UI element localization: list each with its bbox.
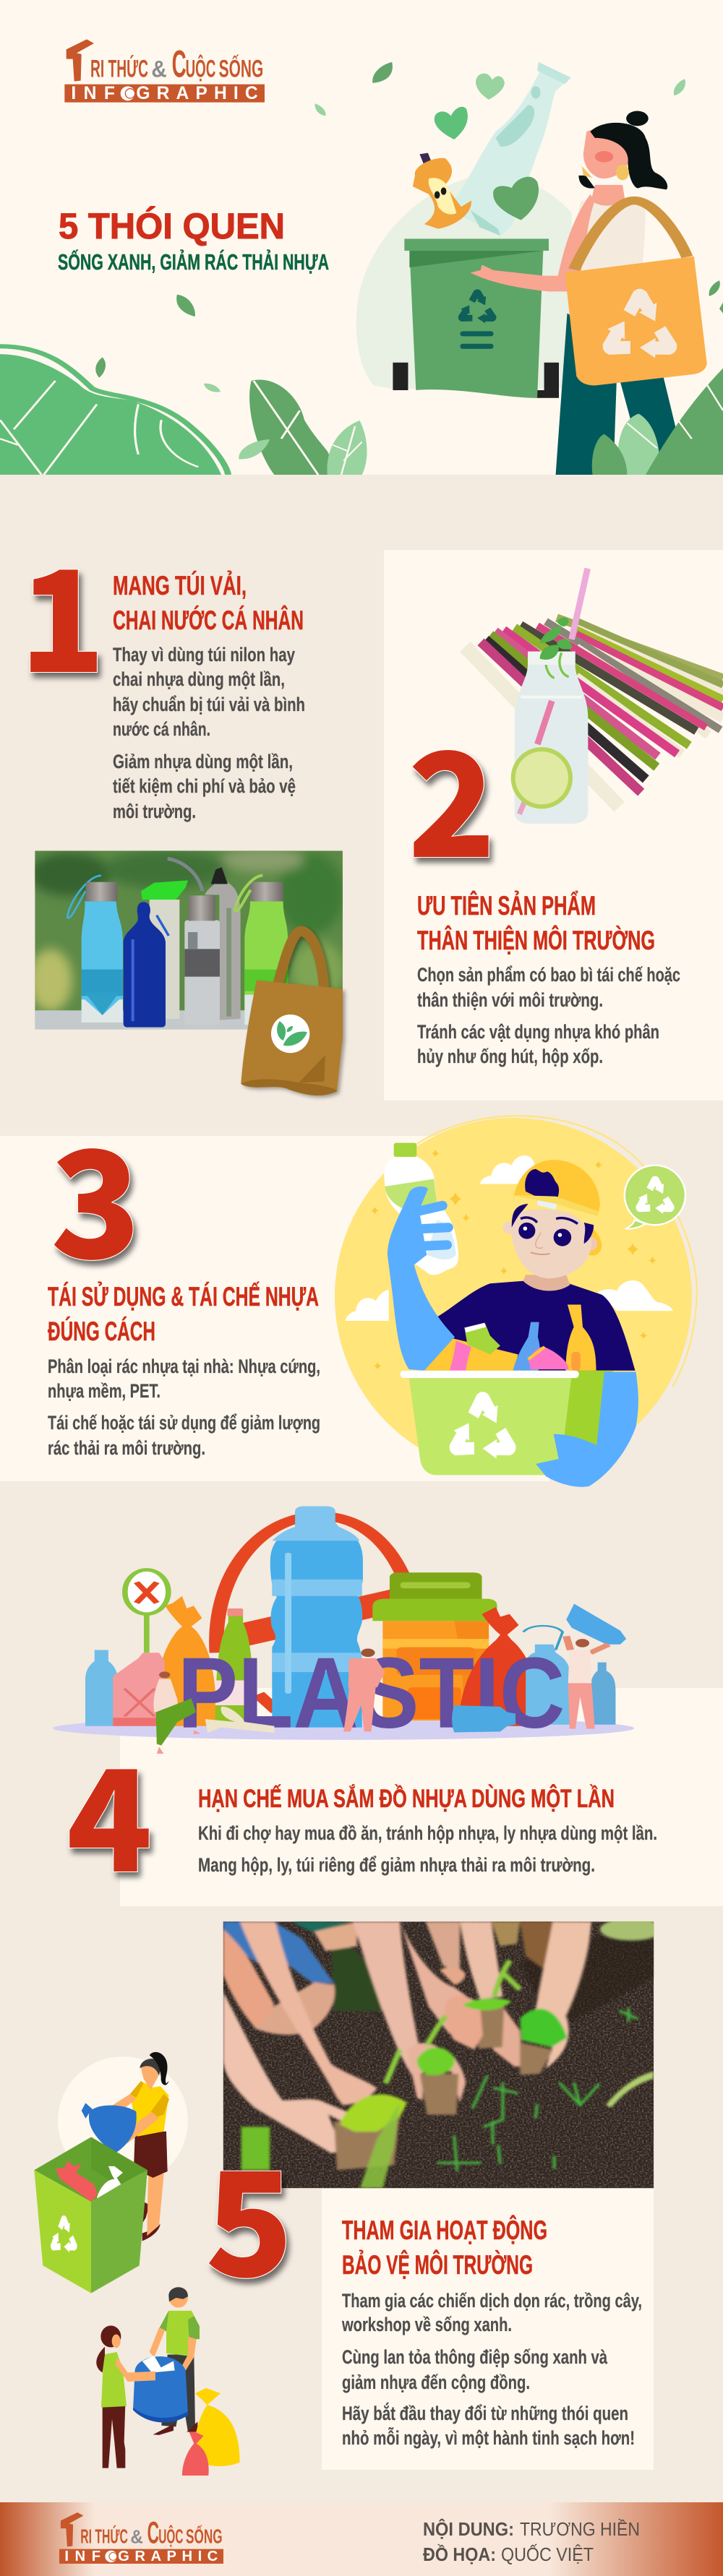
basket	[400, 1371, 615, 1475]
bottle in hand	[384, 1143, 458, 1275]
heading habit 2	[417, 890, 655, 955]
panel: habit 3	[0, 1087, 697, 1487]
panel: habit 2	[384, 550, 723, 1100]
number 4: 4	[67, 1709, 153, 1913]
text card	[322, 2189, 654, 2470]
blue jug right	[523, 1626, 570, 1725]
text habit 5: giảm nhựa đến cộng đồng.	[342, 2372, 530, 2393]
woman with ponytail	[96, 2326, 155, 2468]
text habit 2	[417, 964, 680, 1067]
logo: INF	[71, 84, 115, 103]
outer ring	[416, 1116, 697, 1387]
footer logo: UỘC	[158, 2525, 183, 2547]
soil texture	[223, 1921, 654, 2188]
text habit 1: Thay vì dùng túi nilon hay	[113, 644, 295, 665]
text habit 3: Phân loại rác nhựa tại nhà: Nhựa cứng,	[48, 1356, 320, 1377]
arms	[223, 1929, 274, 2027]
heading habit 1: CHAI NƯỚC CÁ NHÂN	[113, 605, 304, 635]
dark blue aluminium bottle	[124, 902, 168, 1028]
footer logo: INF	[64, 2549, 100, 2564]
footer	[0, 2502, 723, 2576]
red bag	[459, 1607, 542, 1726]
large water bottle	[270, 1506, 363, 1728]
subtitle: SỐNG XANH, GIẢM RÁC THẢI NHỰA	[58, 249, 329, 275]
credits: ĐỒ HỌA:	[423, 2543, 496, 2565]
green bottle	[235, 876, 288, 1025]
blue waste bin bag	[133, 2356, 188, 2423]
man lifting jug	[566, 1604, 626, 1729]
green bin	[34, 2137, 147, 2293]
title: 5 THÓI QUEN	[59, 206, 285, 246]
heading habit 3: TÁI SỬ DỤNG & TÁI CHẾ NHỰA	[48, 1281, 319, 1311]
hearts	[435, 74, 505, 139]
panel: habit 5	[34, 1918, 663, 2476]
speech bubble recycle	[625, 1166, 685, 1229]
tote bag	[565, 257, 707, 385]
blob behind bin	[356, 175, 572, 389]
header illustration: recycling woman and leaves	[0, 62, 723, 475]
number 3: 3	[51, 1087, 141, 1301]
text habit 1: nước cá nhân.	[113, 718, 210, 740]
credits: NỘI DUNG:	[423, 2518, 514, 2540]
photo: children planting seedlings	[223, 1918, 663, 2188]
heading habit 1	[113, 570, 304, 635]
right glove	[536, 1372, 638, 1487]
heading habit 1: MANG TÚI VẢI,	[113, 570, 247, 600]
heading habit 5: BẢO VỆ MÔI TRƯỜNG	[342, 2249, 533, 2280]
number 1: 1	[20, 509, 106, 713]
sparkle stars	[371, 1150, 656, 1369]
prohibition sign	[216, 1516, 415, 1711]
heading habit 5: THAM GIA HOẠT ĐỘNG	[342, 2215, 547, 2245]
text habit 1: chai nhựa dùng một lần,	[113, 668, 285, 690]
shirt	[424, 1281, 636, 1371]
credits	[423, 2518, 640, 2565]
footer logo	[59, 2512, 223, 2564]
standing person	[343, 1649, 385, 1731]
green glass bottle	[215, 1608, 254, 1725]
panel: habit 4	[53, 1506, 723, 1913]
heading habit 2: ƯU TIÊN SẢN PHẨM	[417, 890, 596, 921]
sitting person	[153, 1671, 200, 1754]
clouds	[345, 1155, 673, 1321]
text habit 2: hủy như ống hút, hộp xốp.	[417, 1046, 603, 1067]
number 2: 2	[408, 689, 496, 899]
heart on bottle	[493, 177, 539, 220]
glass bottle	[454, 62, 571, 236]
cream circle	[58, 2056, 188, 2186]
text habit 1	[113, 644, 305, 822]
text habit 1: hãy chuẩn bị túi vải và bình	[113, 694, 305, 715]
yellow circle	[335, 1118, 692, 1475]
photo: reusable bottles	[29, 848, 345, 1095]
text habit 5: workshop về sống xanh.	[341, 2314, 512, 2335]
spoon and fork	[205, 1707, 274, 1733]
silver bottle	[168, 858, 241, 1020]
logo	[64, 39, 265, 103]
left glove	[388, 1186, 455, 1371]
green bin	[393, 238, 559, 398]
text habit 5: Hãy bắt đầu thay đổi từ những thói quen	[342, 2402, 628, 2424]
head with cap	[502, 1160, 602, 1278]
orange bag	[155, 1596, 217, 1726]
illustration: woman and bin	[34, 2052, 240, 2476]
text habit 4: Mang hộp, ly, túi riêng để giảm nhựa thải ra môi trường.	[198, 1854, 595, 1876]
blue shorts and skin background	[223, 1921, 334, 1983]
sprouts	[438, 2009, 637, 2170]
left water bottle	[85, 1650, 118, 1726]
person with green shirt	[150, 2287, 200, 2435]
text habit 1: tiết kiệm chi phí và bảo vệ	[113, 775, 296, 797]
recycle symbol on basket	[443, 1392, 522, 1465]
illustration: anti plastic scene	[53, 1506, 634, 1754]
neck	[523, 1275, 570, 1291]
text habit 3	[48, 1356, 320, 1459]
blue bag	[82, 2103, 137, 2154]
text habit 5: Cùng lan tỏa thông điệp sống xanh và	[342, 2346, 608, 2368]
text habit 3: rác thải ra môi trường.	[48, 1437, 205, 1459]
logo: &	[151, 56, 167, 82]
panel: header	[0, 0, 723, 475]
steel bottle with sleeve	[184, 895, 220, 1025]
apple core	[413, 153, 471, 229]
footer logo: RI THỨC	[80, 2525, 128, 2547]
yellow bag	[194, 2388, 240, 2466]
floating leaves	[95, 62, 723, 392]
text habit 2: thân thiện với môi trường.	[417, 989, 603, 1011]
mint leaves	[540, 617, 573, 678]
recycle symbol on bin	[458, 289, 496, 324]
middle leaves	[239, 380, 367, 475]
straws and glass bottle	[465, 569, 723, 824]
glass bottle	[511, 652, 588, 824]
fallen blue bottle	[452, 1705, 515, 1732]
footer logo: GRAPHIC	[118, 2549, 218, 2564]
text habit 5	[341, 2290, 642, 2449]
illustration: boy with recycling basket	[335, 1116, 697, 1487]
text habit 4	[198, 1822, 657, 1876]
text habit 3: Tái chế hoặc tái sử dụng để giảm lượng	[48, 1412, 320, 1434]
footer logo: SỐNG	[186, 2525, 223, 2547]
pink straw	[572, 569, 588, 639]
number 5: 5	[205, 2108, 294, 2318]
credits: QUỐC VIỆT	[501, 2543, 594, 2565]
logo: UỘC	[186, 55, 215, 83]
logo: RI THỨC	[90, 56, 148, 83]
orange tub	[372, 1572, 497, 1720]
text habit 3: nhựa mềm, PET.	[48, 1380, 161, 1402]
blue lemon bottle	[67, 876, 123, 1022]
logo: GRAPHIC	[136, 84, 258, 103]
footer logo: &	[130, 2526, 143, 2547]
heading habit 3: ĐÚNG CÁCH	[48, 1316, 155, 1346]
red bag	[182, 2432, 209, 2476]
heading habit 3	[48, 1281, 319, 1346]
text habit 1: Giảm nhựa dùng một lần,	[113, 751, 293, 772]
text habit 5: nhỏ mỗi ngày, vì một hành tinh sạch hơn!	[342, 2426, 635, 2449]
foreground leaves right	[592, 369, 723, 475]
small right bottle	[590, 1663, 615, 1725]
clear bottle with green lid	[141, 880, 188, 1019]
pink jug	[113, 1653, 165, 1726]
credits: TRƯƠNG HIỀN	[520, 2518, 640, 2540]
text habit 1: môi trường.	[113, 801, 196, 822]
heading habit 5	[342, 2215, 547, 2280]
tote bag with leaf logo	[241, 931, 343, 1095]
no sign	[125, 1569, 168, 1653]
footer logo: C	[147, 2516, 159, 2550]
woman with tote bag	[471, 111, 707, 475]
logo: C	[172, 43, 187, 86]
seedlings	[340, 1998, 567, 2132]
woman	[111, 2052, 169, 2241]
bottles in basket	[413, 1305, 596, 1371]
panel: habit 1	[20, 509, 345, 1095]
blurred foreground shoots	[241, 2127, 270, 2170]
logo: SỐNG	[219, 55, 263, 83]
straws	[465, 618, 723, 807]
large leaf left	[0, 346, 228, 475]
peat pots	[334, 2005, 553, 2170]
ground ellipse	[53, 1717, 634, 1740]
